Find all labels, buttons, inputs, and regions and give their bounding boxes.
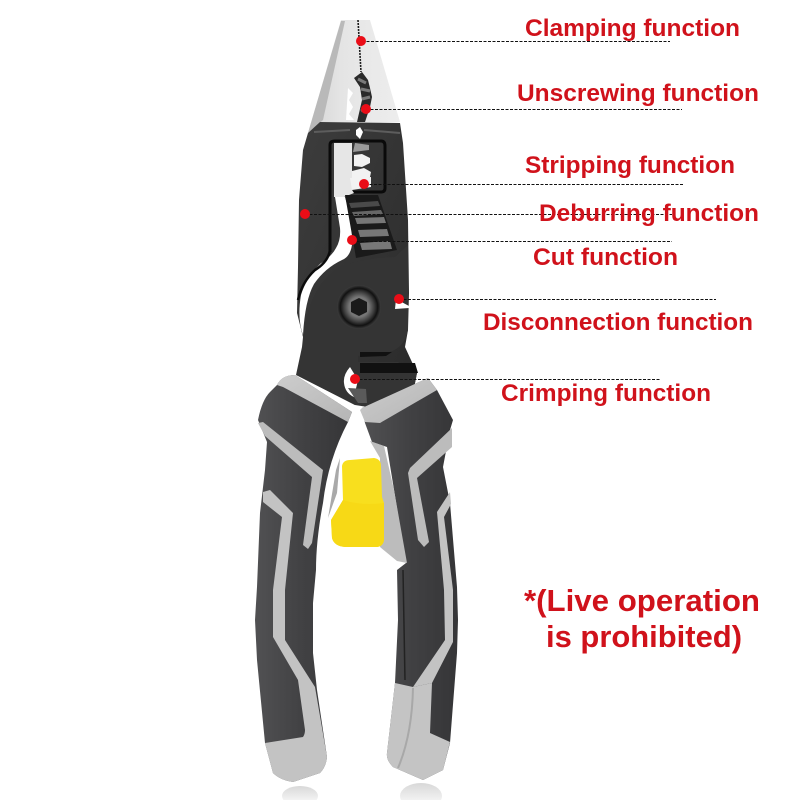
icon: spring <box>328 441 407 563</box>
warning note <box>524 583 760 654</box>
label: cut: Cut function <box>533 244 678 271</box>
leader lines <box>305 42 716 380</box>
label: crimping: Crimping function <box>501 380 711 407</box>
warning note: *(Live operation <box>524 583 760 618</box>
label: deburring: Deburring function <box>539 200 759 227</box>
label: unscrewing: Unscrewing function <box>517 80 759 107</box>
icon: metal head <box>296 122 418 409</box>
icon: floor reflections <box>282 783 442 800</box>
icon: left handle <box>255 375 352 782</box>
icon: right handle <box>360 378 458 780</box>
icon: pivot bolt <box>337 285 381 329</box>
label: disconnection: Disconnection function <box>483 309 753 336</box>
pliers illustration <box>255 20 458 800</box>
warning note: is prohibited) <box>546 619 742 654</box>
icon: wire cutter notch <box>395 299 409 309</box>
label: clamping: Clamping function <box>525 15 740 42</box>
icon: pivot lobe <box>297 245 417 409</box>
icon: upper steel jaw <box>308 20 400 133</box>
icon: stripping teeth <box>334 127 371 197</box>
icon: crimping hole <box>344 352 418 403</box>
icon: deburring ribs <box>345 195 397 258</box>
icon: white curved slot <box>299 197 352 335</box>
label: stripping: Stripping function <box>525 152 735 179</box>
icon: yellow spring lock <box>331 458 384 547</box>
callout markers <box>300 36 404 384</box>
